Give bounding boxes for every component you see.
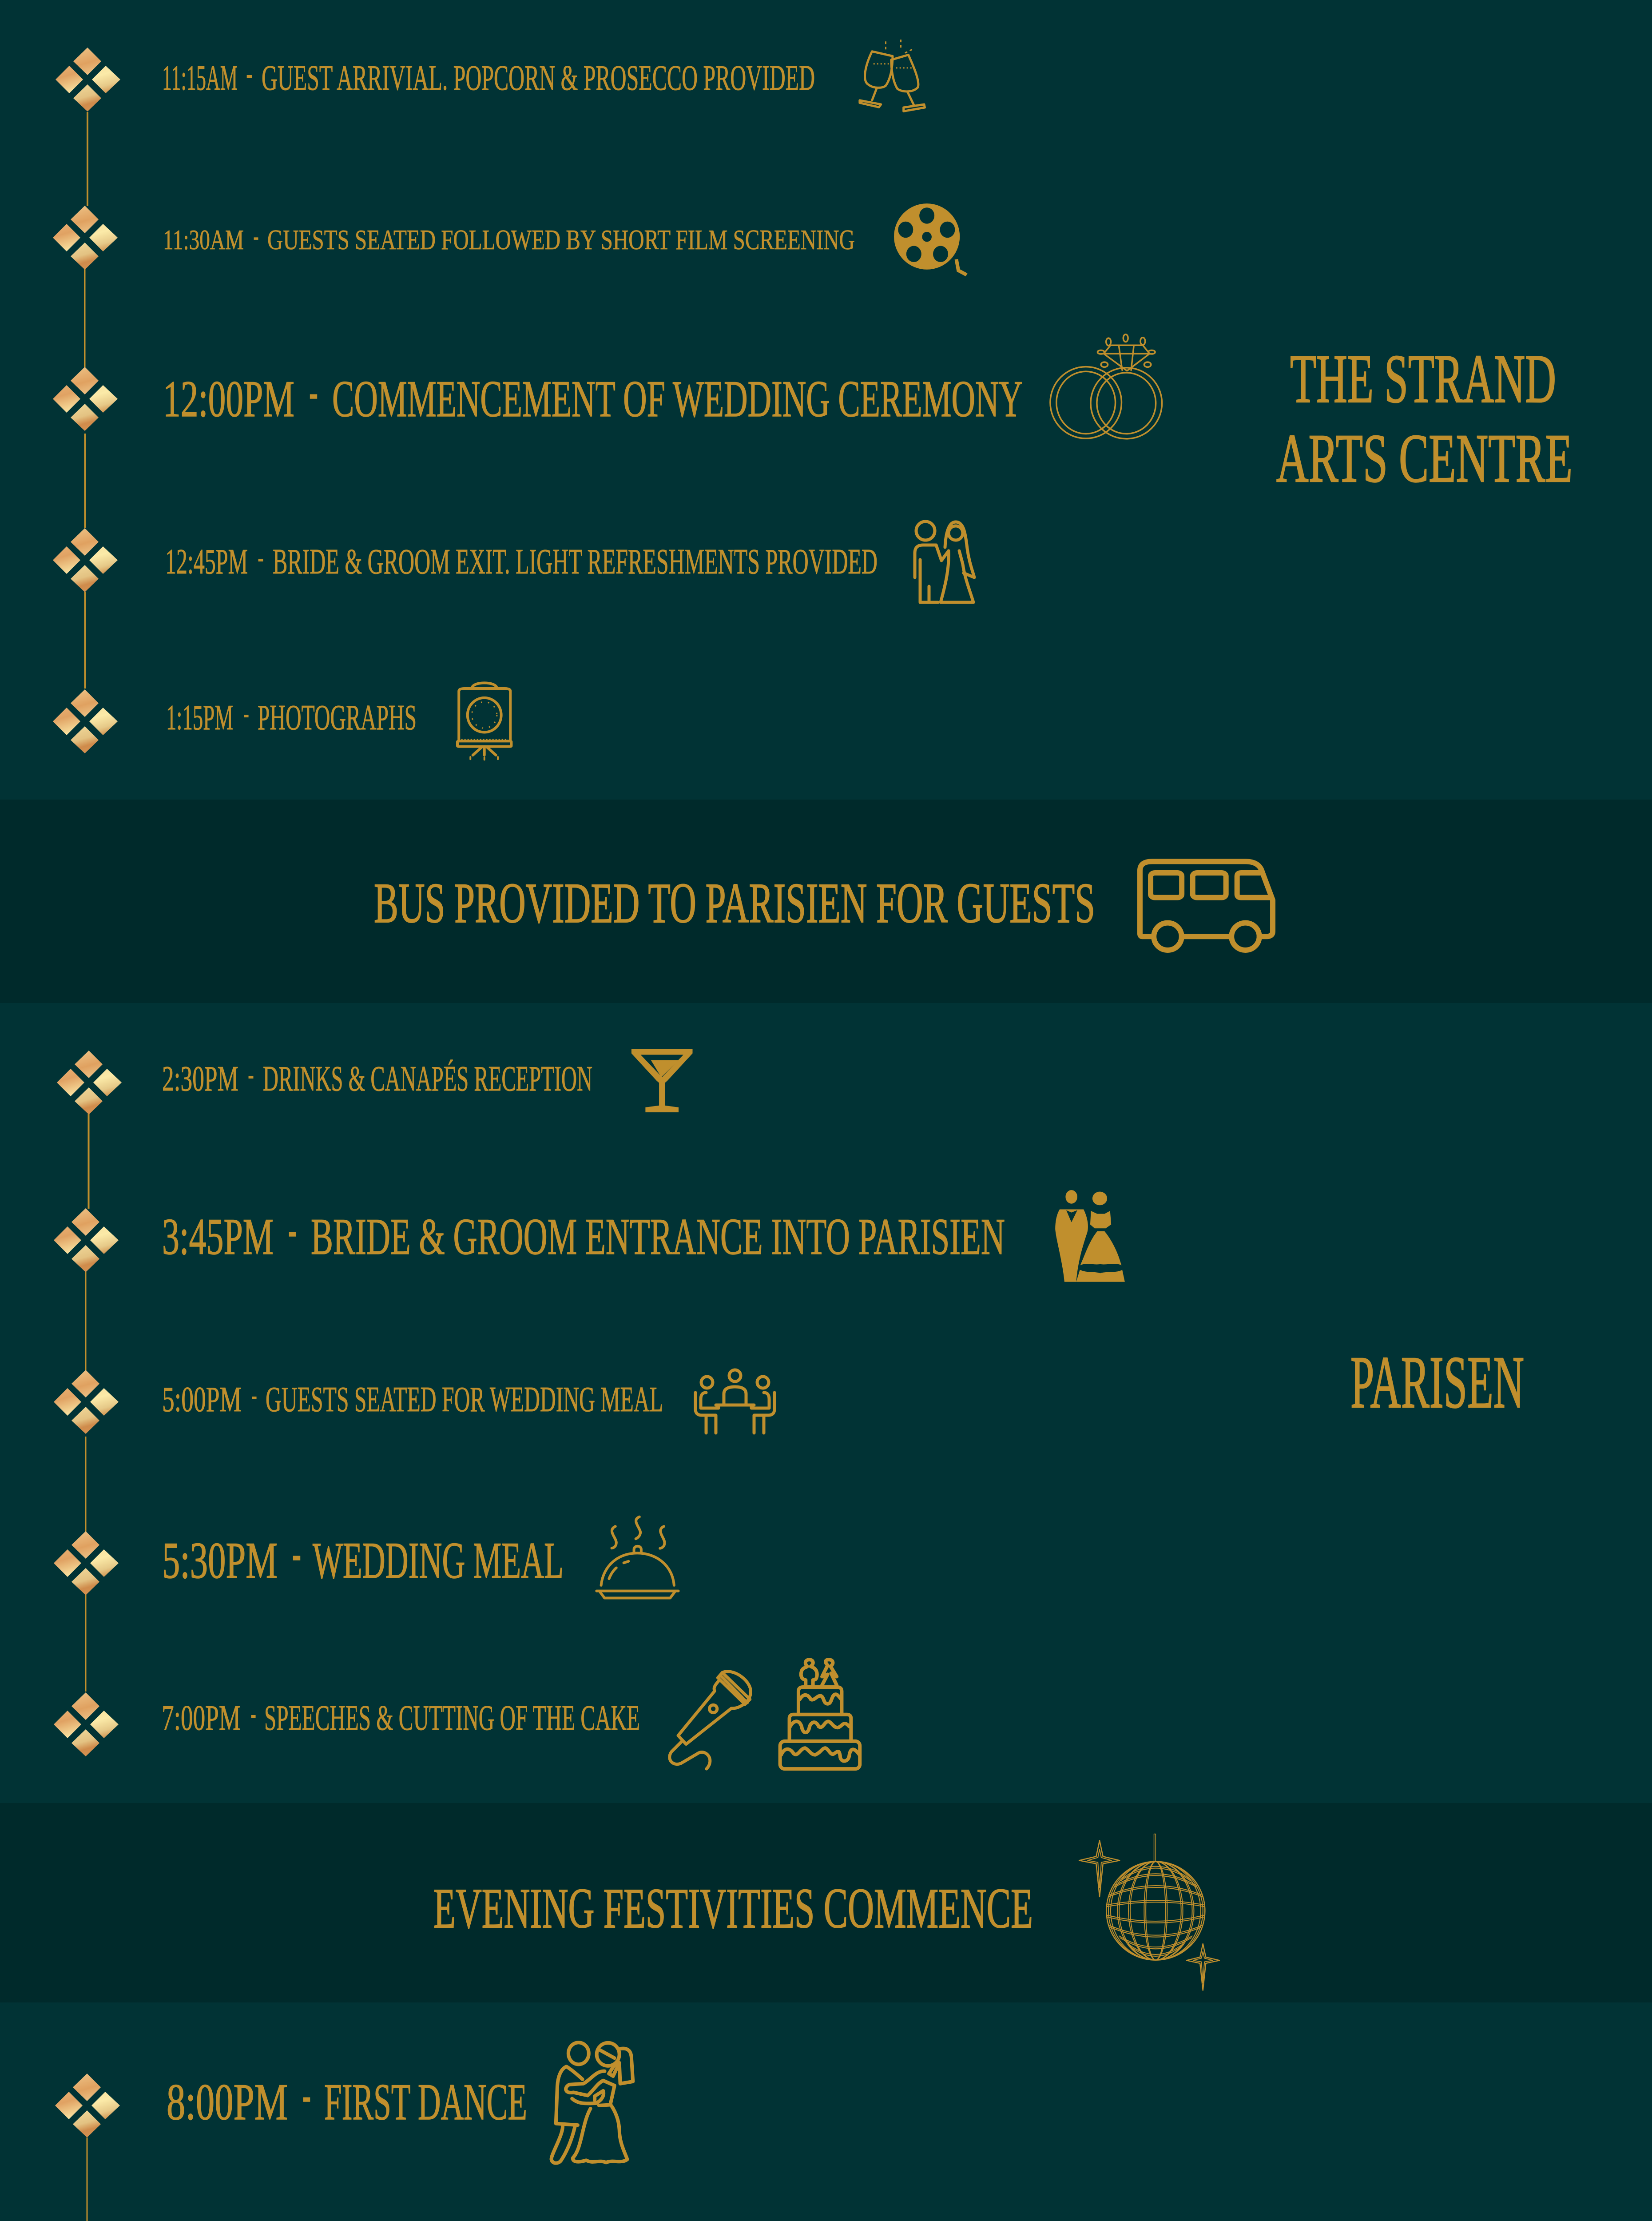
- text: bride and groom exit: BRIDE & GROOM EXIT. LIGHT REFRESHMENTS PROVIDED: [273, 542, 878, 581]
- marker: 3:45pm: [54, 1208, 119, 1272]
- text: speeches and cake: SPEECHES & CUTTING OF THE CAKE: [264, 1699, 640, 1738]
- text: wedding meal: 5:30PM: [162, 1532, 278, 1589]
- icon: dancing couple: [552, 2042, 633, 2163]
- text: wedding meal: -: [292, 1524, 301, 1582]
- text: guests seated for meal: 5:00PM: [162, 1380, 242, 1419]
- timeline connector lines: [85, 1114, 90, 1692]
- text: wedding meal: WEDDING MEAL: [313, 1532, 564, 1589]
- venue name: The Strand Arts Centre: [1276, 340, 1573, 497]
- text: drinks and canapes: [162, 1055, 592, 1099]
- text: guests seated for meal: GUESTS SEATED FOR WEDDING MEAL: [266, 1380, 663, 1419]
- marker: 11:15am: [56, 48, 120, 111]
- panel: evening festivities at Parisien: [52, 2042, 1524, 2221]
- marker: 7:00pm: [54, 1692, 119, 1756]
- icon: champagne glasses: [860, 40, 925, 111]
- icon: wedding cake: [780, 1660, 860, 1769]
- marker: 11:30am: [53, 206, 118, 270]
- icon: disco ball with sparkles: [1079, 1834, 1219, 1990]
- text: photographs: [166, 693, 417, 737]
- text: drinks and canapes: DRINKS & CANAPÉS RECEPTION: [263, 1059, 592, 1099]
- text: guests seated: GUESTS SEATED FOLLOWED BY SHORT FILM SCREENING: [267, 224, 855, 255]
- timeline connector lines: [84, 112, 88, 689]
- text: first dance: -: [302, 2066, 311, 2123]
- text: drinks and canapes: 2:30PM: [162, 1059, 238, 1099]
- marker: 8:00pm: [55, 2074, 120, 2137]
- text: bride and groom entrance: 3:45PM: [162, 1208, 274, 1266]
- text: guest arrival: GUEST ARRIVIAL. POPCORN & PROSECCO PROVIDED: [262, 59, 815, 98]
- text: wedding ceremony: -: [309, 363, 318, 420]
- text: wedding meal: [162, 1524, 564, 1589]
- icon: martini glass: [631, 1049, 693, 1112]
- text: drinks and canapes: -: [248, 1055, 254, 1094]
- text: guest arrival: -: [246, 54, 253, 93]
- text: first dance: FIRST DANCE: [324, 2074, 527, 2131]
- text: first dance: [167, 2066, 527, 2131]
- venue name: Parisen: PARISEN: [1350, 1341, 1524, 1424]
- text: first dance: 8:00PM: [167, 2074, 288, 2131]
- text: photographs: -: [243, 693, 249, 732]
- marker: 12:00pm: [53, 367, 118, 431]
- text: wedding ceremony: 12:00PM: [163, 370, 294, 428]
- text: bride and groom entrance: [162, 1201, 1005, 1266]
- text: guests seated: 11:30AM: [163, 224, 244, 255]
- marker: 1:15pm: [53, 689, 118, 753]
- text: bride and groom exit: -: [258, 537, 264, 577]
- text: guests seated for meal: [162, 1375, 663, 1419]
- text: bride and groom exit: 12:45PM: [165, 542, 248, 581]
- text: guests seated for meal: -: [251, 1375, 257, 1414]
- icon: film reel: [894, 203, 967, 275]
- banner background: [0, 1803, 1652, 2002]
- marker: 12:45pm: [53, 528, 118, 592]
- text: photographs: PHOTOGRAPHS: [258, 698, 417, 737]
- panel: reception at Parisien: [54, 1049, 1524, 1769]
- icon: photo backdrop camera: [457, 683, 511, 760]
- text: guests seated: -: [253, 220, 258, 251]
- banner background: [0, 800, 1652, 1003]
- text: wedding ceremony: COMMENCEMENT OF WEDDING CEREMONY: [332, 370, 1023, 428]
- text: bride and groom exit: [165, 537, 878, 581]
- marker: 2:30pm: [57, 1051, 122, 1114]
- panel: ceremony at The Strand Arts Centre: [53, 40, 1573, 760]
- icon: bride and groom silhouettes: [1055, 1190, 1125, 1282]
- icon: bus: [1140, 861, 1273, 950]
- marker: 5:00pm: [54, 1370, 119, 1434]
- text: speeches and cake: -: [250, 1694, 256, 1733]
- heading: bus provided: BUS PROVIDED TO PARISIEN FOR GUESTS: [374, 872, 1095, 935]
- panel: bus banner: [0, 800, 1652, 1003]
- text: photographs: 1:15PM: [166, 698, 233, 737]
- text: speeches and cake: 7:00PM: [162, 1699, 241, 1738]
- text: bride and groom entrance: -: [288, 1201, 297, 1258]
- icon: microphone: [670, 1672, 751, 1769]
- text: guest arrival: 11:15AM: [162, 59, 238, 98]
- text: guest arrival: [162, 54, 815, 98]
- panel: evening banner: [0, 1803, 1652, 2002]
- marker: 5:30pm: [54, 1531, 119, 1595]
- heading: evening festivities: EVENING FESTIVITIES COMMENCE: [433, 1877, 1033, 1940]
- text: speeches and cake: [162, 1694, 640, 1738]
- text: guests seated: [163, 220, 855, 255]
- text: bride and groom entrance: BRIDE & GROOM ENTRANCE INTO PARISIEN: [311, 1208, 1005, 1266]
- text: wedding ceremony: [163, 363, 1023, 428]
- icon: guests at table: [695, 1370, 774, 1433]
- icon: serving cloche: [596, 1517, 679, 1598]
- icon: bride and groom outline: [915, 521, 974, 602]
- timeline connector lines: [83, 2137, 88, 2221]
- icon: wedding rings: [1050, 334, 1162, 439]
